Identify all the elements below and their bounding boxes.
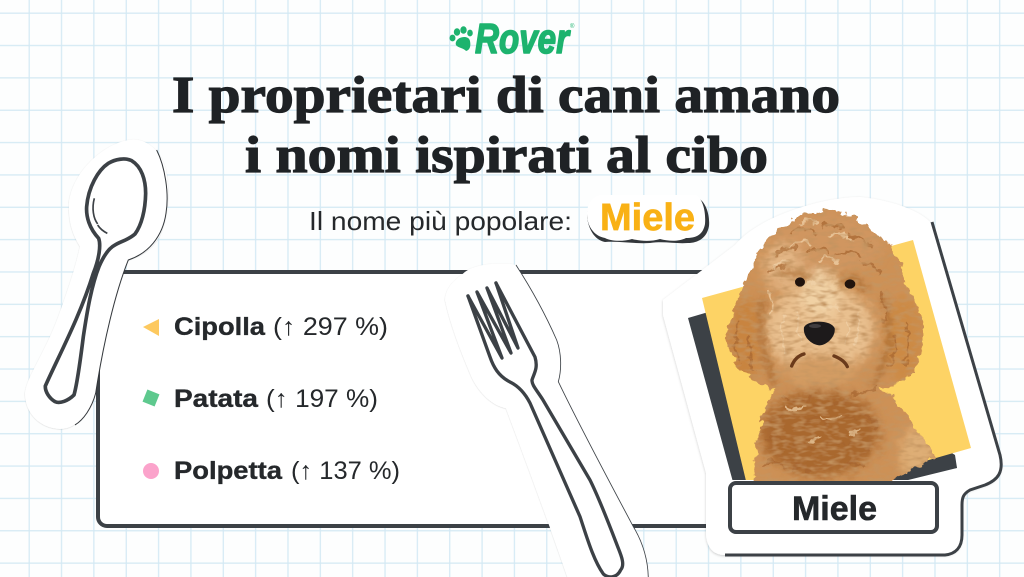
list item: Polpetta: Polpetta (174, 457, 283, 485)
panel: food names (98, 272, 738, 526)
photo: golden doodle (725, 208, 936, 481)
yellow square (702, 240, 971, 510)
subtitle: Il nome più popolare: (309, 206, 572, 236)
title: i nomi ispirati al cibo (245, 127, 768, 184)
dark backing square (688, 308, 957, 482)
list item: Patata: Patata (174, 385, 259, 413)
badge: Miele: Miele (600, 197, 695, 239)
icon: paw (450, 26, 473, 51)
dark strip right bottom (871, 455, 957, 482)
white cover under photo (726, 480, 941, 500)
list item: Polpetta: (↑ 137 %) (291, 457, 400, 485)
list item: Cipolla (143, 313, 388, 341)
icon: spoon sticker (25, 139, 168, 429)
icon: fork sticker (445, 263, 648, 577)
name label: Miele (792, 490, 877, 528)
logo: Rover: ® (570, 23, 575, 30)
list item: Patata: (↑ 197 %) (266, 385, 378, 413)
title: I proprietari di cani amano (172, 67, 840, 124)
list item: Cipolla: Cipolla (174, 313, 266, 341)
name label (730, 483, 937, 532)
dog card sticker (663, 197, 1001, 555)
list item: Cipolla: (↑ 297 %) (273, 313, 388, 341)
badge: Miele (587, 195, 709, 243)
list item: Patata (143, 385, 378, 413)
title (172, 67, 840, 184)
face details (795, 277, 805, 287)
logo: Rover (450, 15, 575, 62)
list item: Polpetta (143, 457, 400, 485)
logo: Rover: Rover (475, 15, 571, 62)
